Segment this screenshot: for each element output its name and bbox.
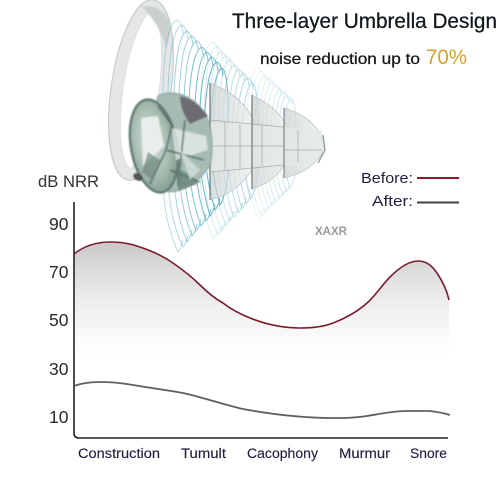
stem xyxy=(200,122,324,172)
axes xyxy=(74,202,448,438)
y-axis title: dB NRR xyxy=(38,172,99,191)
x-axis labels: Construction xyxy=(78,446,160,461)
x-axis labels: Murmur xyxy=(339,446,391,461)
earplug head xyxy=(123,93,212,196)
y-axis labels xyxy=(49,214,69,427)
umbrella flanges xyxy=(200,83,325,200)
subtitle: noise reduction up to xyxy=(260,51,420,68)
earplug ring xyxy=(99,0,183,184)
legend xyxy=(361,170,459,210)
watermark: XAXR: XAXR xyxy=(315,224,347,238)
x-axis labels: Tumult xyxy=(181,446,226,461)
legend: after: After: xyxy=(372,193,413,210)
legend: before: Before: xyxy=(361,170,413,187)
y-axis labels: 50 xyxy=(49,310,69,330)
y-axis labels: 90 xyxy=(49,214,69,234)
after line xyxy=(74,382,450,418)
before line xyxy=(74,242,449,328)
highlight: 70%: 70% xyxy=(426,46,467,69)
y-axis labels: 10 xyxy=(49,407,69,427)
x-axis labels: Snore xyxy=(410,446,447,461)
y-axis labels: 30 xyxy=(49,359,69,379)
icon: transparent earplug with sound waves xyxy=(99,0,325,252)
y-axis labels: 70 xyxy=(49,262,69,282)
x-axis labels: Cacophony xyxy=(247,446,318,461)
title: Three-layer Umbrella Design xyxy=(232,10,497,33)
x-axis labels xyxy=(78,446,447,461)
sound waves xyxy=(162,20,296,252)
line chart xyxy=(49,202,450,461)
before area fill xyxy=(74,242,449,356)
